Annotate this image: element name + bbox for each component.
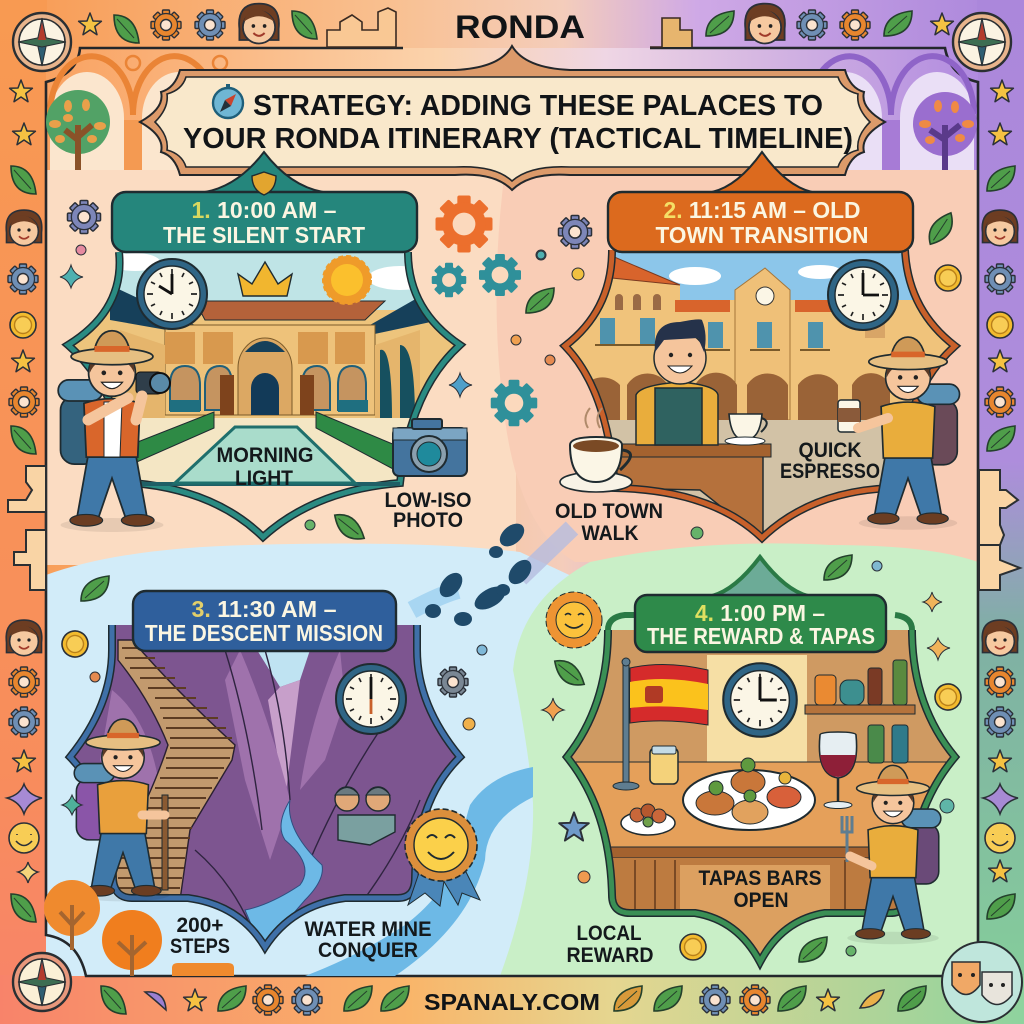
icon: camera: [393, 419, 467, 476]
clock: [723, 663, 797, 737]
small espresso cup on counter: [725, 414, 767, 445]
caption: quick espresso: ESPRESSO: [780, 460, 880, 483]
header plate: THE REWARD & TAPAS: [647, 623, 875, 649]
title: RONDA: [455, 9, 585, 45]
caption: morning light: [175, 427, 355, 490]
caption: 200+ steps: [170, 914, 230, 958]
icon: sun: [323, 256, 371, 304]
header plate: [112, 192, 417, 252]
header plate: 4. 1:00 PM –: [695, 600, 825, 626]
caption: 200+ steps: STEPS: [170, 935, 230, 958]
clock: [336, 664, 406, 734]
caption: local reward: LOCAL: [576, 922, 642, 945]
caption: morning light: MORNING: [216, 444, 314, 467]
caption: water mine conquer: WATER MINE: [304, 918, 432, 941]
header plate: [133, 591, 396, 651]
headline text: STRATEGY: ADDING THESE PALACES TO: [253, 90, 823, 122]
large coffee cup: [560, 408, 632, 492]
traveller on stairs: [74, 719, 170, 901]
explorers in canyon: [335, 787, 395, 845]
caption: tapas bars open: TAPAS BARS: [698, 867, 822, 890]
header plate: THE DESCENT MISSION: [145, 620, 383, 646]
caption: tapas bars open: [698, 867, 822, 912]
frame outline: [567, 615, 955, 962]
wine glass: [819, 732, 857, 808]
corner theatre masks bottom right: [942, 942, 1022, 1022]
jar: [650, 746, 678, 784]
caption: old town walk: [555, 500, 663, 545]
decorative icons around panel 4: [542, 555, 966, 962]
header plate: TOWN TRANSITION: [656, 222, 868, 248]
caption: old town walk: OLD TOWN: [555, 500, 663, 523]
left icon border column: [6, 80, 46, 922]
panel: 2 old town transition: [537, 152, 961, 550]
traveller with fork: [842, 765, 941, 944]
decorative icons around panel 1: [60, 196, 554, 543]
header plate: THE SILENT START: [163, 222, 365, 248]
tapas bar scene: [572, 630, 950, 954]
caption: water mine conquer: [304, 918, 432, 962]
footprints trail: [412, 519, 572, 626]
panel: 3 descent mission: [44, 576, 487, 976]
clock: [137, 259, 207, 329]
tree right: [913, 92, 977, 170]
plaza scene: [571, 252, 949, 532]
frame outline: [68, 252, 460, 537]
clock: [828, 260, 898, 330]
canyon scene: [75, 625, 455, 940]
top icon border row: [79, 4, 953, 47]
frame top finial: [205, 152, 323, 192]
header plate: [608, 192, 913, 252]
purple arches top right: [808, 56, 974, 170]
caption: local reward: [566, 922, 654, 967]
corner compass top right: [953, 13, 1011, 71]
caption: 200+ steps: 200+: [176, 914, 224, 937]
header plate: [635, 595, 886, 652]
decorative icons around panel 2: [537, 213, 961, 539]
caption: local reward: REWARD: [566, 944, 654, 967]
courtyard scene: [74, 252, 454, 482]
header plate: 1. 10:00 AM –: [192, 197, 337, 223]
small olive plate: [621, 804, 675, 835]
frame top finial: [712, 152, 812, 192]
river: [305, 767, 533, 976]
frame top finial: [712, 557, 808, 596]
headline text: [183, 90, 853, 155]
caption: water mine conquer: CONQUER: [318, 939, 418, 962]
sun face: [546, 592, 602, 648]
tree left: [46, 90, 110, 170]
frame outline: [70, 625, 460, 947]
caption: quick espresso: QUICK: [798, 439, 862, 462]
headline text: YOUR RONDA ITINERARY (TACTICAL TIMELINE): [183, 123, 853, 155]
bottom icon border row: [101, 985, 926, 1015]
frame outline: [565, 250, 955, 538]
caption: low-iso photo: [384, 489, 472, 532]
caption: low-iso photo: PHOTO: [393, 509, 463, 532]
header plate: 2. 11:15 AM – OLD: [664, 197, 860, 223]
icon: crown: [238, 262, 292, 296]
corner compass bottom left: [13, 953, 71, 1011]
decorative icons around panel 3: [58, 576, 487, 815]
icon: coin: [680, 934, 706, 960]
caption: quick espresso: [780, 439, 880, 483]
tapas platter: [683, 758, 815, 830]
corner compass top left: [13, 13, 71, 71]
caption: tapas bars open: OPEN: [734, 889, 788, 912]
caption: morning light: LIGHT: [235, 467, 293, 490]
medal: [405, 809, 480, 906]
right icon border column: [979, 80, 1020, 919]
footer website: SPANALY.COM: [424, 989, 600, 1015]
panel: 4 reward and tapas: [542, 555, 966, 968]
traveller with camera: [58, 331, 170, 532]
icon: shield: [252, 172, 276, 195]
orange arches top left: [50, 56, 227, 170]
caption: low-iso photo: LOW-ISO: [384, 489, 472, 512]
caption: old town walk: WALK: [582, 522, 638, 545]
headline banner: [140, 46, 885, 190]
header plate: 3. 11:30 AM –: [192, 596, 337, 622]
barista: [636, 319, 718, 445]
icon: compass: [213, 84, 243, 118]
flag of Spain: [613, 658, 708, 790]
panel: 1 silent start: [58, 152, 554, 543]
traveller with coffee: [838, 337, 960, 530]
autumn trees: [44, 880, 234, 976]
